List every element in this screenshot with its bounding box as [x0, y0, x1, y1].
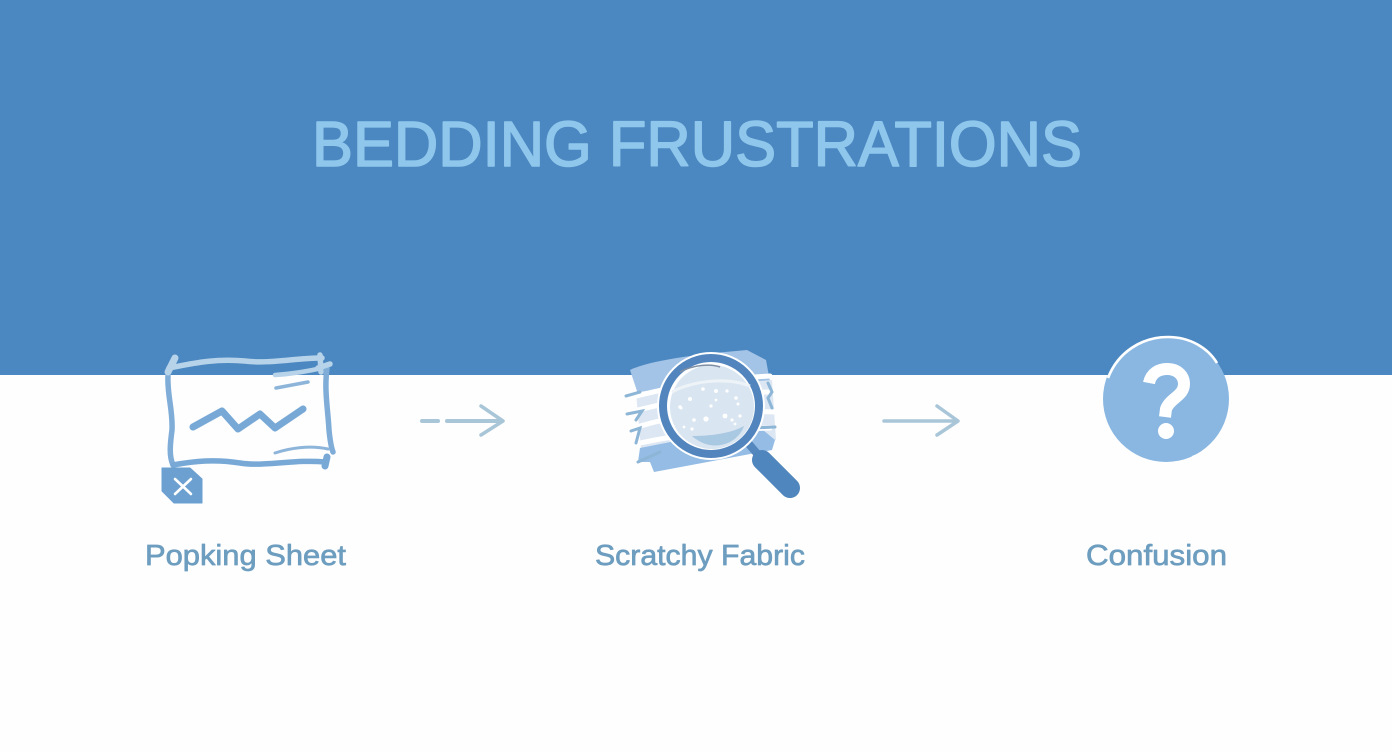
white fabric stripes	[628, 376, 775, 444]
wrinkle marks	[275, 368, 322, 375]
zigzag wrinkle	[193, 409, 303, 429]
icon: x badge	[162, 468, 202, 503]
label: scratchy fabric: Scratchy Fabric	[595, 540, 805, 572]
magnifier lens	[657, 352, 765, 460]
blue header band	[0, 0, 1392, 375]
arrow 1	[422, 406, 503, 435]
icon: scratchy fabric under magnifier	[626, 350, 790, 488]
sheet outline left edge	[168, 376, 173, 465]
magnifier handle	[748, 443, 760, 457]
label: confusion: Confusion	[1086, 540, 1227, 572]
sheet outline top edge	[169, 358, 322, 368]
title: BEDDING FRUSTRATIONS	[312, 108, 1082, 180]
arrow 2	[884, 406, 958, 435]
fabric layers	[630, 350, 772, 400]
icon: question mark circle	[1103, 336, 1229, 462]
sheet outline right edge	[326, 368, 333, 452]
label: popping sheet: Popking Sheet	[145, 540, 346, 572]
sheet outline bottom edge	[173, 461, 325, 465]
icon: popping sheet	[168, 355, 333, 466]
